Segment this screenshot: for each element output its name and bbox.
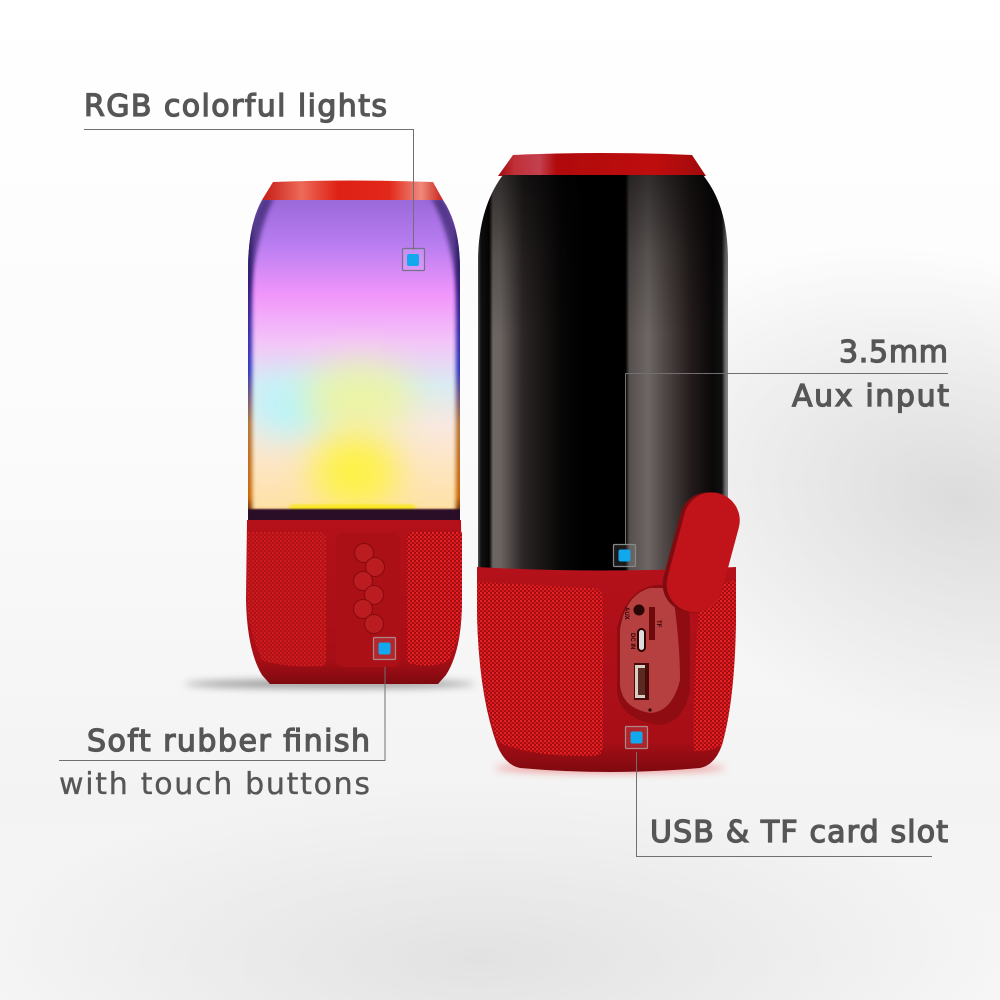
right speaker: black gloss <box>477 153 746 773</box>
top cap <box>262 180 443 200</box>
base collar <box>477 567 736 772</box>
marker: aux input <box>614 544 636 566</box>
gloss body <box>478 175 728 575</box>
marker: touch buttons <box>374 638 396 660</box>
AUX port <box>634 604 644 616</box>
USB port <box>634 663 649 700</box>
right fabric panel <box>694 580 736 751</box>
shadow under left speaker <box>185 680 475 688</box>
port labels: AUX <box>623 607 629 620</box>
top cap <box>498 153 706 176</box>
label: 3.5mm Aux input: 3.5mm <box>839 335 948 370</box>
label: Soft rubber finish with touch buttons <box>59 724 370 802</box>
port labels <box>623 607 661 649</box>
callout lines <box>59 130 948 856</box>
right fabric panel <box>407 532 462 666</box>
glowing light column <box>244 195 464 523</box>
touch buttons <box>354 544 384 634</box>
rubber base <box>246 520 462 684</box>
marker: USB and TF slot <box>626 726 648 748</box>
port panel <box>617 585 690 725</box>
TF slot <box>649 607 655 640</box>
left fabric panel <box>247 532 326 666</box>
label: Soft rubber finish with touch buttons: with touch buttons <box>59 767 370 802</box>
label: RGB colorful lights: RGB colorful lights <box>84 89 387 124</box>
reflection under right speaker <box>495 763 725 773</box>
label: 3.5mm Aux input: Aux input <box>792 379 949 414</box>
left fabric panel <box>477 582 603 756</box>
marker: RGB lights <box>402 248 424 270</box>
port labels: TF <box>655 620 661 628</box>
left speaker: RGB light mode <box>185 180 475 688</box>
DC port <box>638 629 645 651</box>
port labels: DC IN <box>629 633 635 649</box>
label: 3.5mm Aux input <box>792 335 949 414</box>
label: USB and TF card slot: USB & TF card slot <box>650 815 948 850</box>
rubber flap <box>656 485 746 619</box>
label: Soft rubber finish with touch buttons: Soft rubber finish <box>87 724 370 759</box>
button panel <box>336 533 400 667</box>
